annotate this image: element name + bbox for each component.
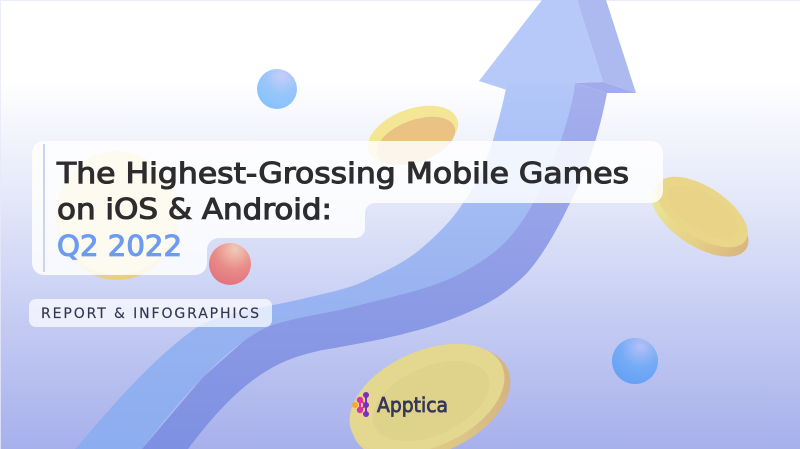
icon: right coin xyxy=(639,163,761,272)
report label xyxy=(29,299,272,327)
logo: Apptica xyxy=(352,392,448,417)
logo: Apptica: Apptica xyxy=(377,393,448,417)
arrow shaft front xyxy=(75,83,575,449)
title: Q2 2022 xyxy=(57,230,182,263)
title panel xyxy=(32,141,663,275)
title xyxy=(56,157,629,263)
arrow head shadow side xyxy=(577,0,636,93)
icon: bottom coin xyxy=(350,344,510,449)
icon: blue ball top xyxy=(257,69,297,109)
title: on iOS & Android: xyxy=(57,193,332,226)
icon: red ball xyxy=(209,243,251,285)
report label: REPORT & INFOGRAPHICS xyxy=(41,306,259,322)
title: The Highest-Grossing Mobile Games xyxy=(56,157,629,190)
icon: top coin xyxy=(360,94,466,176)
arrow head front xyxy=(479,0,603,90)
icon: blue ball right xyxy=(612,338,658,384)
arrow head underside xyxy=(575,82,636,93)
arrow shaft side xyxy=(142,83,607,449)
icon: rising arrow xyxy=(75,0,636,449)
title accent bar xyxy=(43,144,45,272)
icon: coin behind title xyxy=(56,151,178,280)
